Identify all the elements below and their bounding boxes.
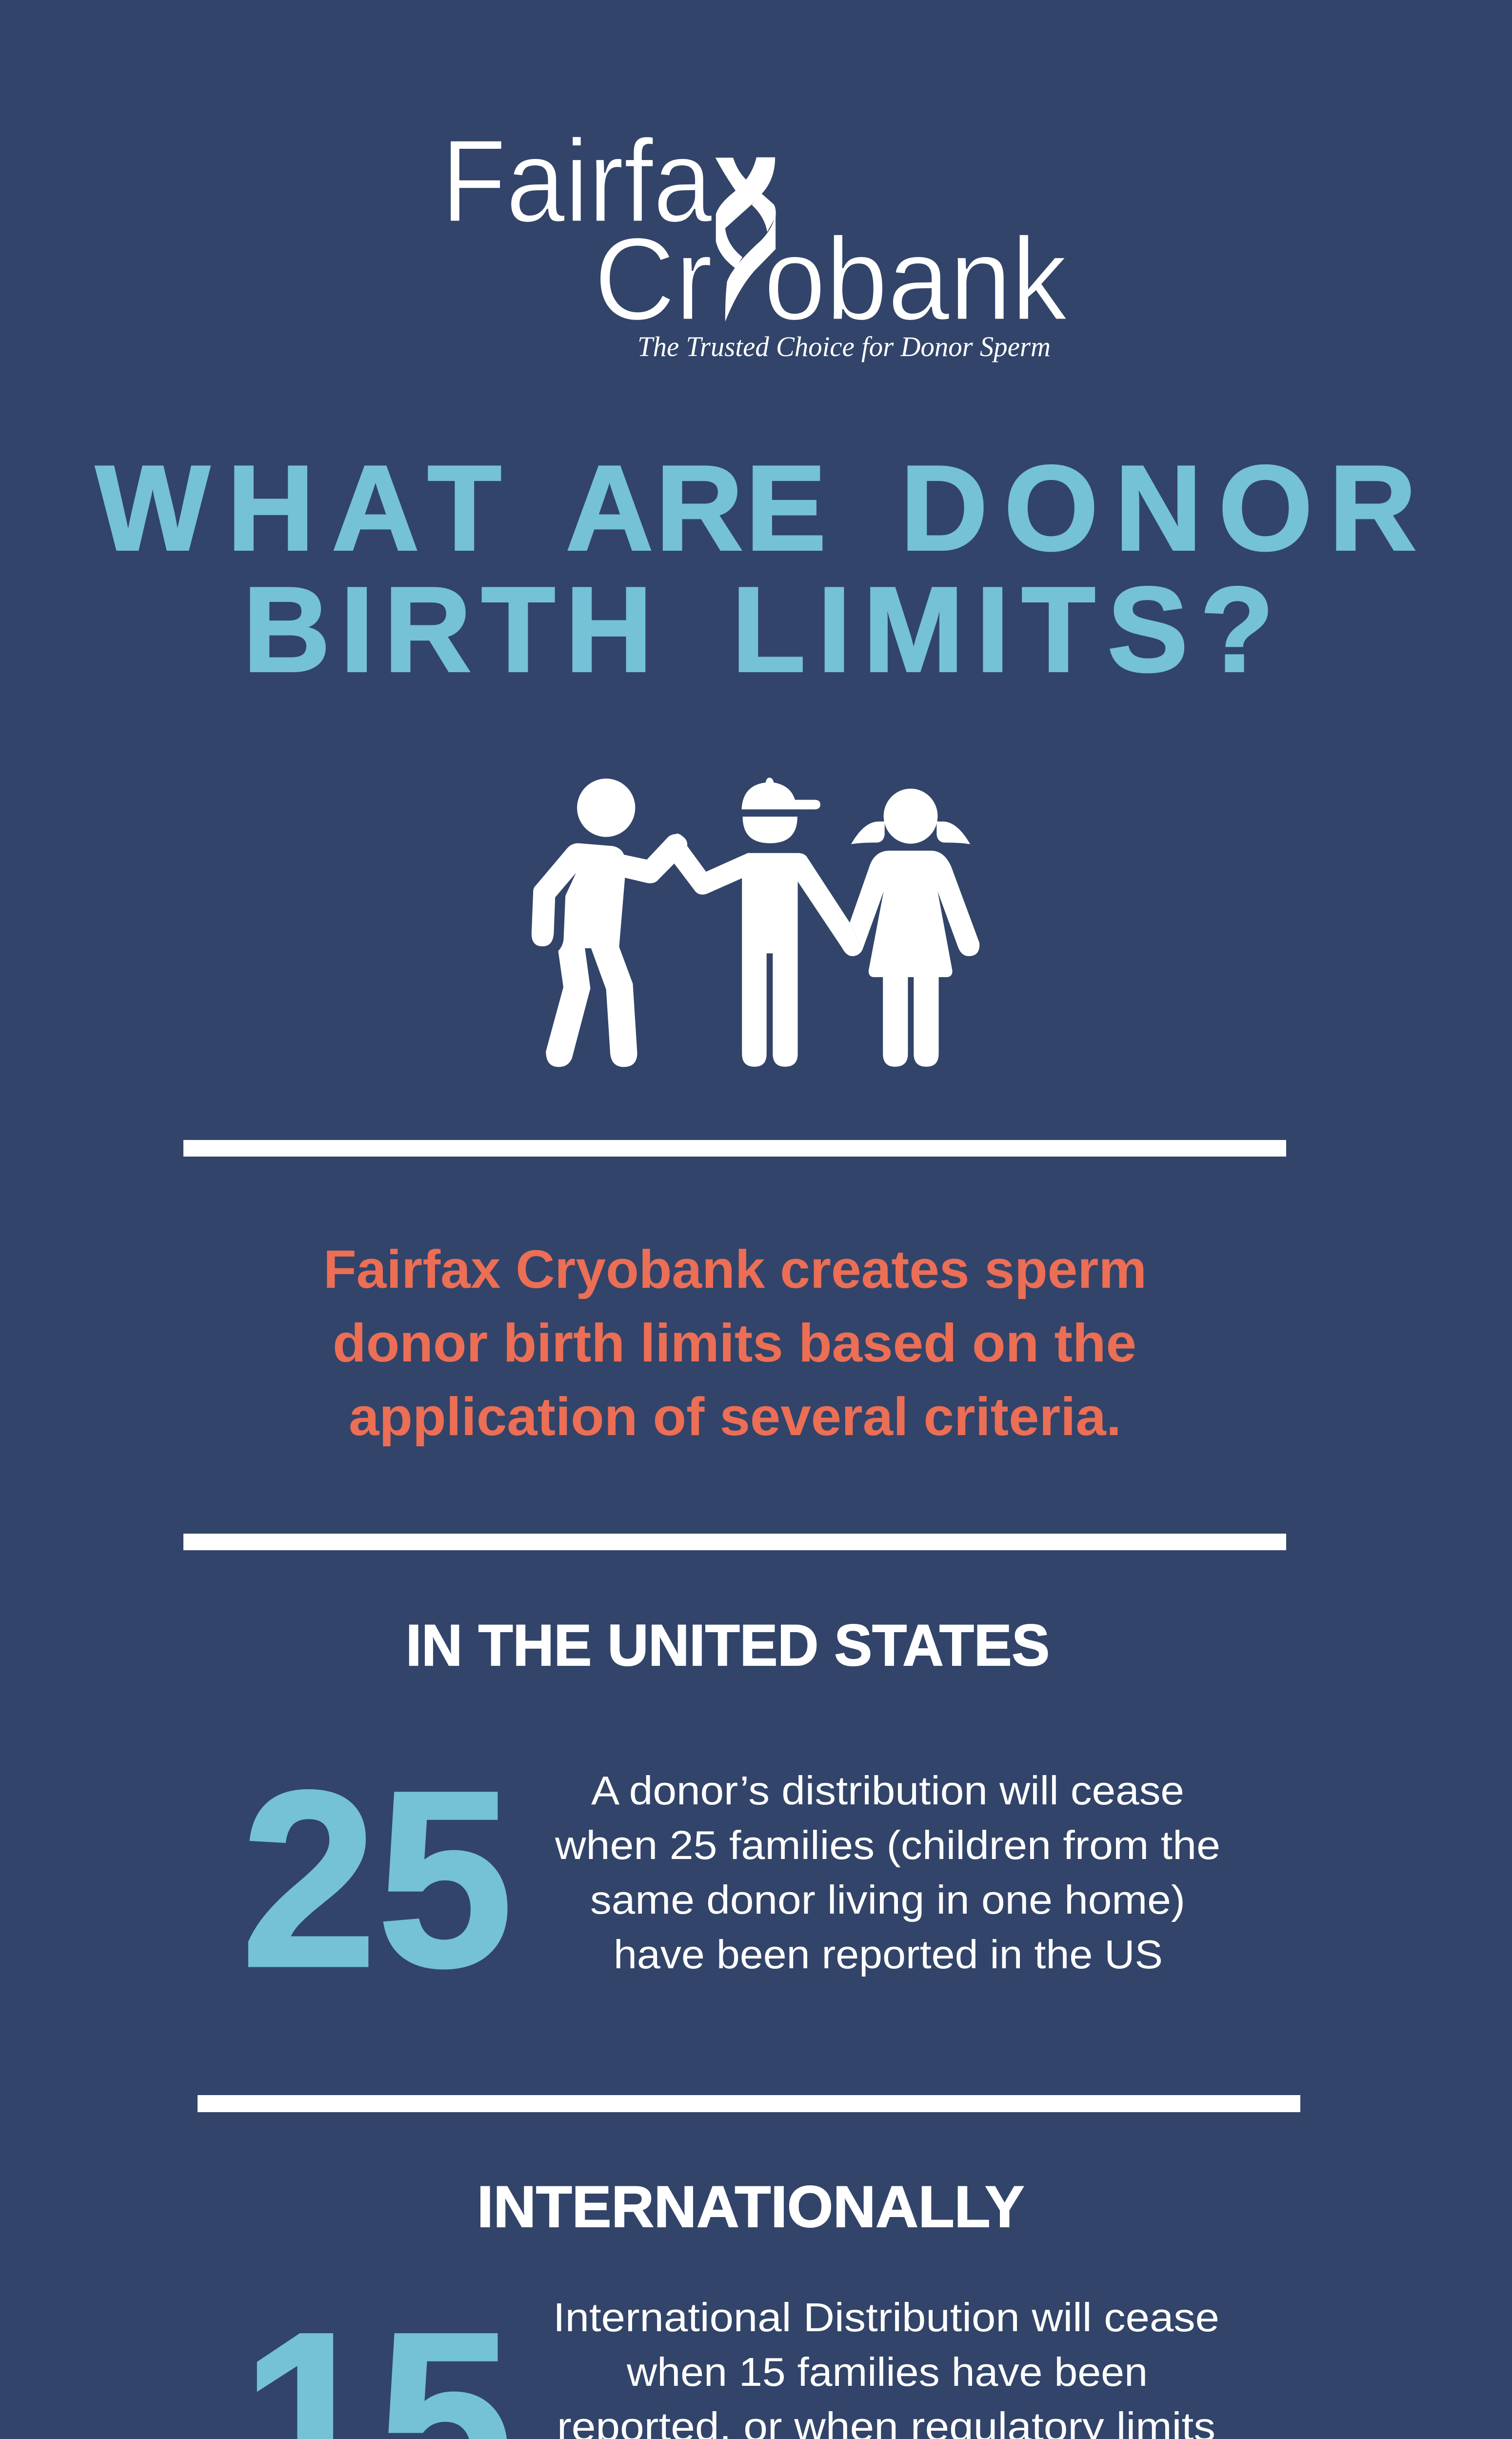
intro statement: application of several criteria. — [349, 1387, 1121, 1447]
number 25: 25 — [241, 1739, 513, 2019]
intro statement: Fairfax Cryobank creates sperm — [323, 1239, 1147, 1299]
logo: Fairfax Cryobank: The Trusted Choice for Donor Sperm — [637, 331, 1051, 362]
panel: internationally — [241, 2174, 1219, 2439]
panel: in the united states — [241, 1613, 1220, 2019]
logo: Fairfax Cryobank — [441, 116, 1067, 362]
logo: Fairfax Cryobank: obank — [764, 214, 1067, 345]
international text block: when 15 families have been — [626, 2349, 1148, 2395]
title: ARE — [566, 440, 826, 576]
international text block: International Distribution will cease — [553, 2295, 1219, 2340]
US text block: same donor living in one home) — [590, 1877, 1185, 1922]
US text block: A donor’s distribution will cease — [591, 1768, 1184, 1813]
US text block: have been reported in the US — [614, 1932, 1163, 1977]
heading: IN THE UNITED STATES — [406, 1613, 1050, 1678]
title: BIRTH — [243, 561, 653, 697]
title — [96, 440, 1416, 697]
US text block: when 25 families (children from the — [555, 1822, 1220, 1868]
title: LIMITS? — [732, 561, 1274, 697]
intro statement: donor birth limits based on the — [333, 1313, 1136, 1373]
intro statement — [323, 1239, 1147, 1447]
icon: family of three figures — [532, 778, 979, 1067]
title: DONOR — [900, 440, 1416, 576]
logo: Fairfax Cryobank: Cr — [594, 214, 713, 345]
logo: Fairfax Cryobank: Fairfa — [441, 116, 713, 247]
title: WHAT — [96, 440, 501, 576]
heading: INTERNATIONALLY — [477, 2174, 1024, 2239]
international text block — [553, 2295, 1219, 2439]
US text block — [555, 1768, 1220, 1977]
